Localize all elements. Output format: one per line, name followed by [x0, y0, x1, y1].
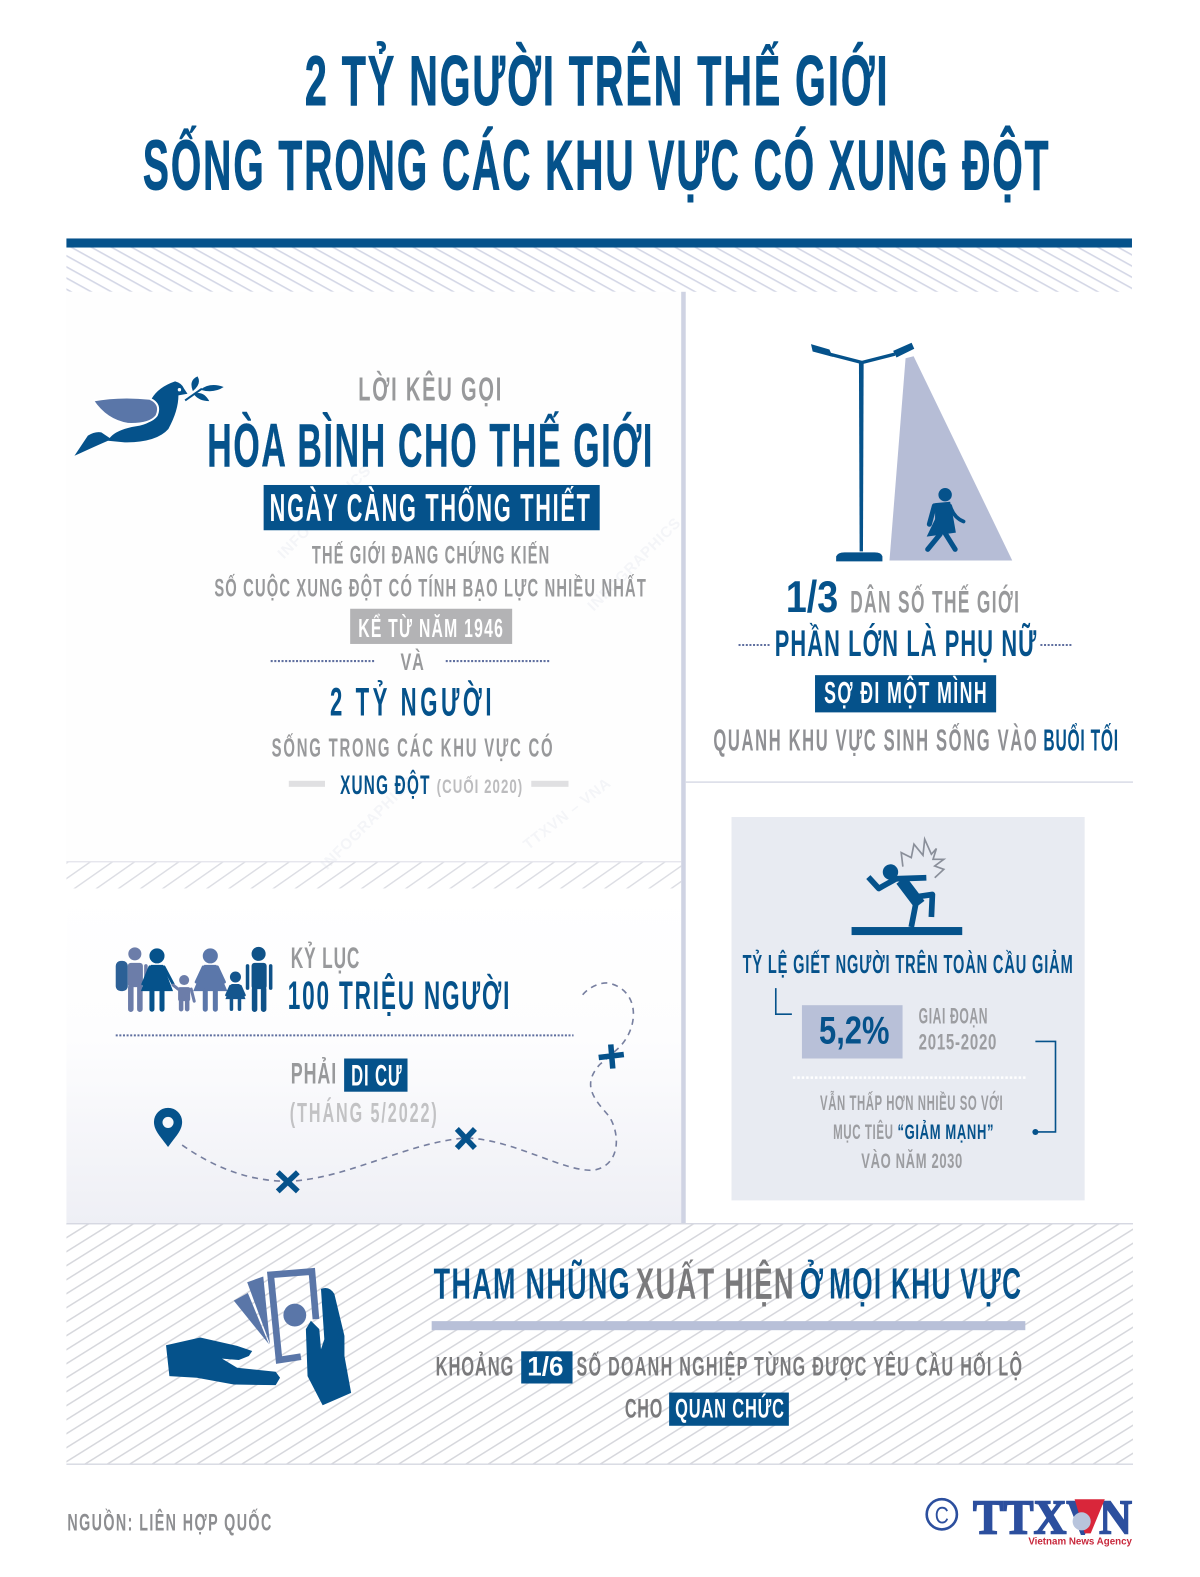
watermarks [275, 462, 685, 873]
text: period: GIAI ĐOẠN [919, 1003, 988, 1028]
icon: walking woman [927, 488, 964, 549]
text: May 2022: (THÁNG 5/2022) [290, 1096, 439, 1128]
icon: street lamp [811, 343, 914, 561]
banner: increasingly urgent [264, 485, 600, 530]
stat: 2 billion people: 2 TỶ NGƯỜI [330, 678, 495, 724]
connector left [776, 988, 792, 1014]
stat: 100 million people: 100 TRIỆU NGƯỜI [288, 972, 511, 1018]
text: around neighbourhood at night: BUỔI TỐI [1043, 724, 1119, 758]
heading: appeal: LỜI KÊU GỌI [358, 370, 503, 408]
icon: cross marker 2 [457, 1129, 475, 1148]
text: target comparison: “GIẢM MẠNH” [898, 1121, 994, 1144]
text: living in areas: SỐNG TRONG CÁC KHU VỰC CÓ [272, 733, 554, 763]
watermarks: INFOGRAPHICS [275, 462, 375, 562]
text: one in six businesses [436, 1349, 1023, 1384]
text: conflict end 2020: XUNG ĐỘT [340, 768, 431, 800]
vertical divider [681, 292, 686, 1224]
text: period [919, 1003, 997, 1054]
heading: corruption everywhere: XUẤT HIỆN [636, 1259, 795, 1308]
text: target comparison: MỤC TIÊU [833, 1120, 894, 1144]
text: to officials: CHO [625, 1393, 663, 1424]
text: conflict end 2020: (CUỐI 2020) [437, 776, 523, 798]
heading: corruption everywhere: Ở [800, 1259, 823, 1308]
panel: fear of walking alone [713, 343, 1119, 758]
logo: copyright TTXVN: TTXVN [973, 1491, 1132, 1544]
heading: corruption everywhere [434, 1259, 1022, 1308]
text: target comparison: VÀO NĂM 2030 [861, 1150, 963, 1173]
text: conflicts: THẾ GIỚI ĐANG CHỨNG KIẾN [312, 539, 550, 569]
panel: corruption [66, 1223, 1133, 1465]
icon: location pin [154, 1108, 182, 1147]
icon: bribe hands [166, 1271, 351, 1405]
panel: peace appeal [66, 292, 685, 873]
title [143, 41, 1050, 205]
text: to officials [625, 1393, 789, 1426]
watermarks: INFOGRAPHICS [318, 773, 418, 873]
icon: cross marker 1 [278, 1172, 298, 1191]
text: must migrate: PHẢI [291, 1057, 337, 1091]
light beam [889, 356, 1012, 560]
connector right [1032, 1041, 1056, 1135]
text: conflicts: SỐ CUỘC XUNG ĐỘT CÓ TÍNH BẠO LỰC NHIỀU NHẤT [214, 573, 647, 603]
text: period: 2015-2020 [919, 1029, 997, 1054]
panel: homicide rate [732, 817, 1085, 1200]
badge: since 1946 [350, 609, 512, 644]
logo: copyright TTXVN: Vietnam News Agency [1028, 1536, 1132, 1548]
stat: one third: 1/3 [786, 573, 838, 622]
logo: copyright TTXVN: C [935, 1502, 949, 1529]
panel: migration [66, 861, 681, 1224]
watermarks: TTXVN – VNA [520, 775, 615, 853]
text: must migrate [291, 1057, 408, 1093]
dotted divider line [116, 1034, 574, 1036]
badge: since 1946: KỂ TỪ NĂM 1946 [358, 613, 504, 643]
text: world population: DÂN SỐ THẾ GIỚI [850, 583, 1020, 619]
text: conflicts [214, 539, 647, 603]
text: conflict end 2020 [289, 768, 569, 800]
heading: peace for the world: HÒA BÌNH CHO THẾ GIỚI [207, 411, 654, 480]
text: target comparison [820, 1091, 1003, 1173]
heading: corruption everywhere: THAM NHŨNG [434, 1259, 631, 1308]
stat: 5,2%: 5,2% [819, 1008, 889, 1052]
icon: family [116, 947, 271, 1009]
banner: afraid to walk alone [815, 675, 996, 712]
text: to officials: QUAN CHỨC [675, 1393, 785, 1424]
text: one in six businesses: KHOẢNG [436, 1349, 514, 1381]
source: NGUỒN: LIÊN HỢP QUỐC [67, 1508, 273, 1536]
text: one in six businesses: 1/6 [527, 1350, 563, 1381]
migration route dashed [182, 983, 633, 1181]
icon: cross marker 3 [599, 1044, 624, 1069]
banner: afraid to walk alone: SỢ ĐI MỘT MÌNH [824, 676, 988, 710]
icon: bag [116, 961, 128, 991]
text: target comparison: VẪN THẤP HƠN NHIỀU SO VỚI [820, 1091, 1003, 1115]
banner: increasingly urgent: NGÀY CÀNG THỐNG THIẾT [270, 485, 592, 530]
text: record: KỶ LỤC [291, 941, 360, 975]
divider: and: VÀ [400, 648, 425, 676]
icon: falling person [852, 839, 962, 935]
heading: corruption everywhere: MỌI KHU VỰC [829, 1260, 1022, 1308]
icon: dove with olive branch [74, 376, 224, 456]
watermarks: INFOGRAPHICS [584, 514, 685, 615]
text: must migrate: DI CƯ [351, 1061, 402, 1093]
stat: 5,2% [802, 1005, 903, 1059]
header rule and hatch band [66, 238, 1132, 292]
